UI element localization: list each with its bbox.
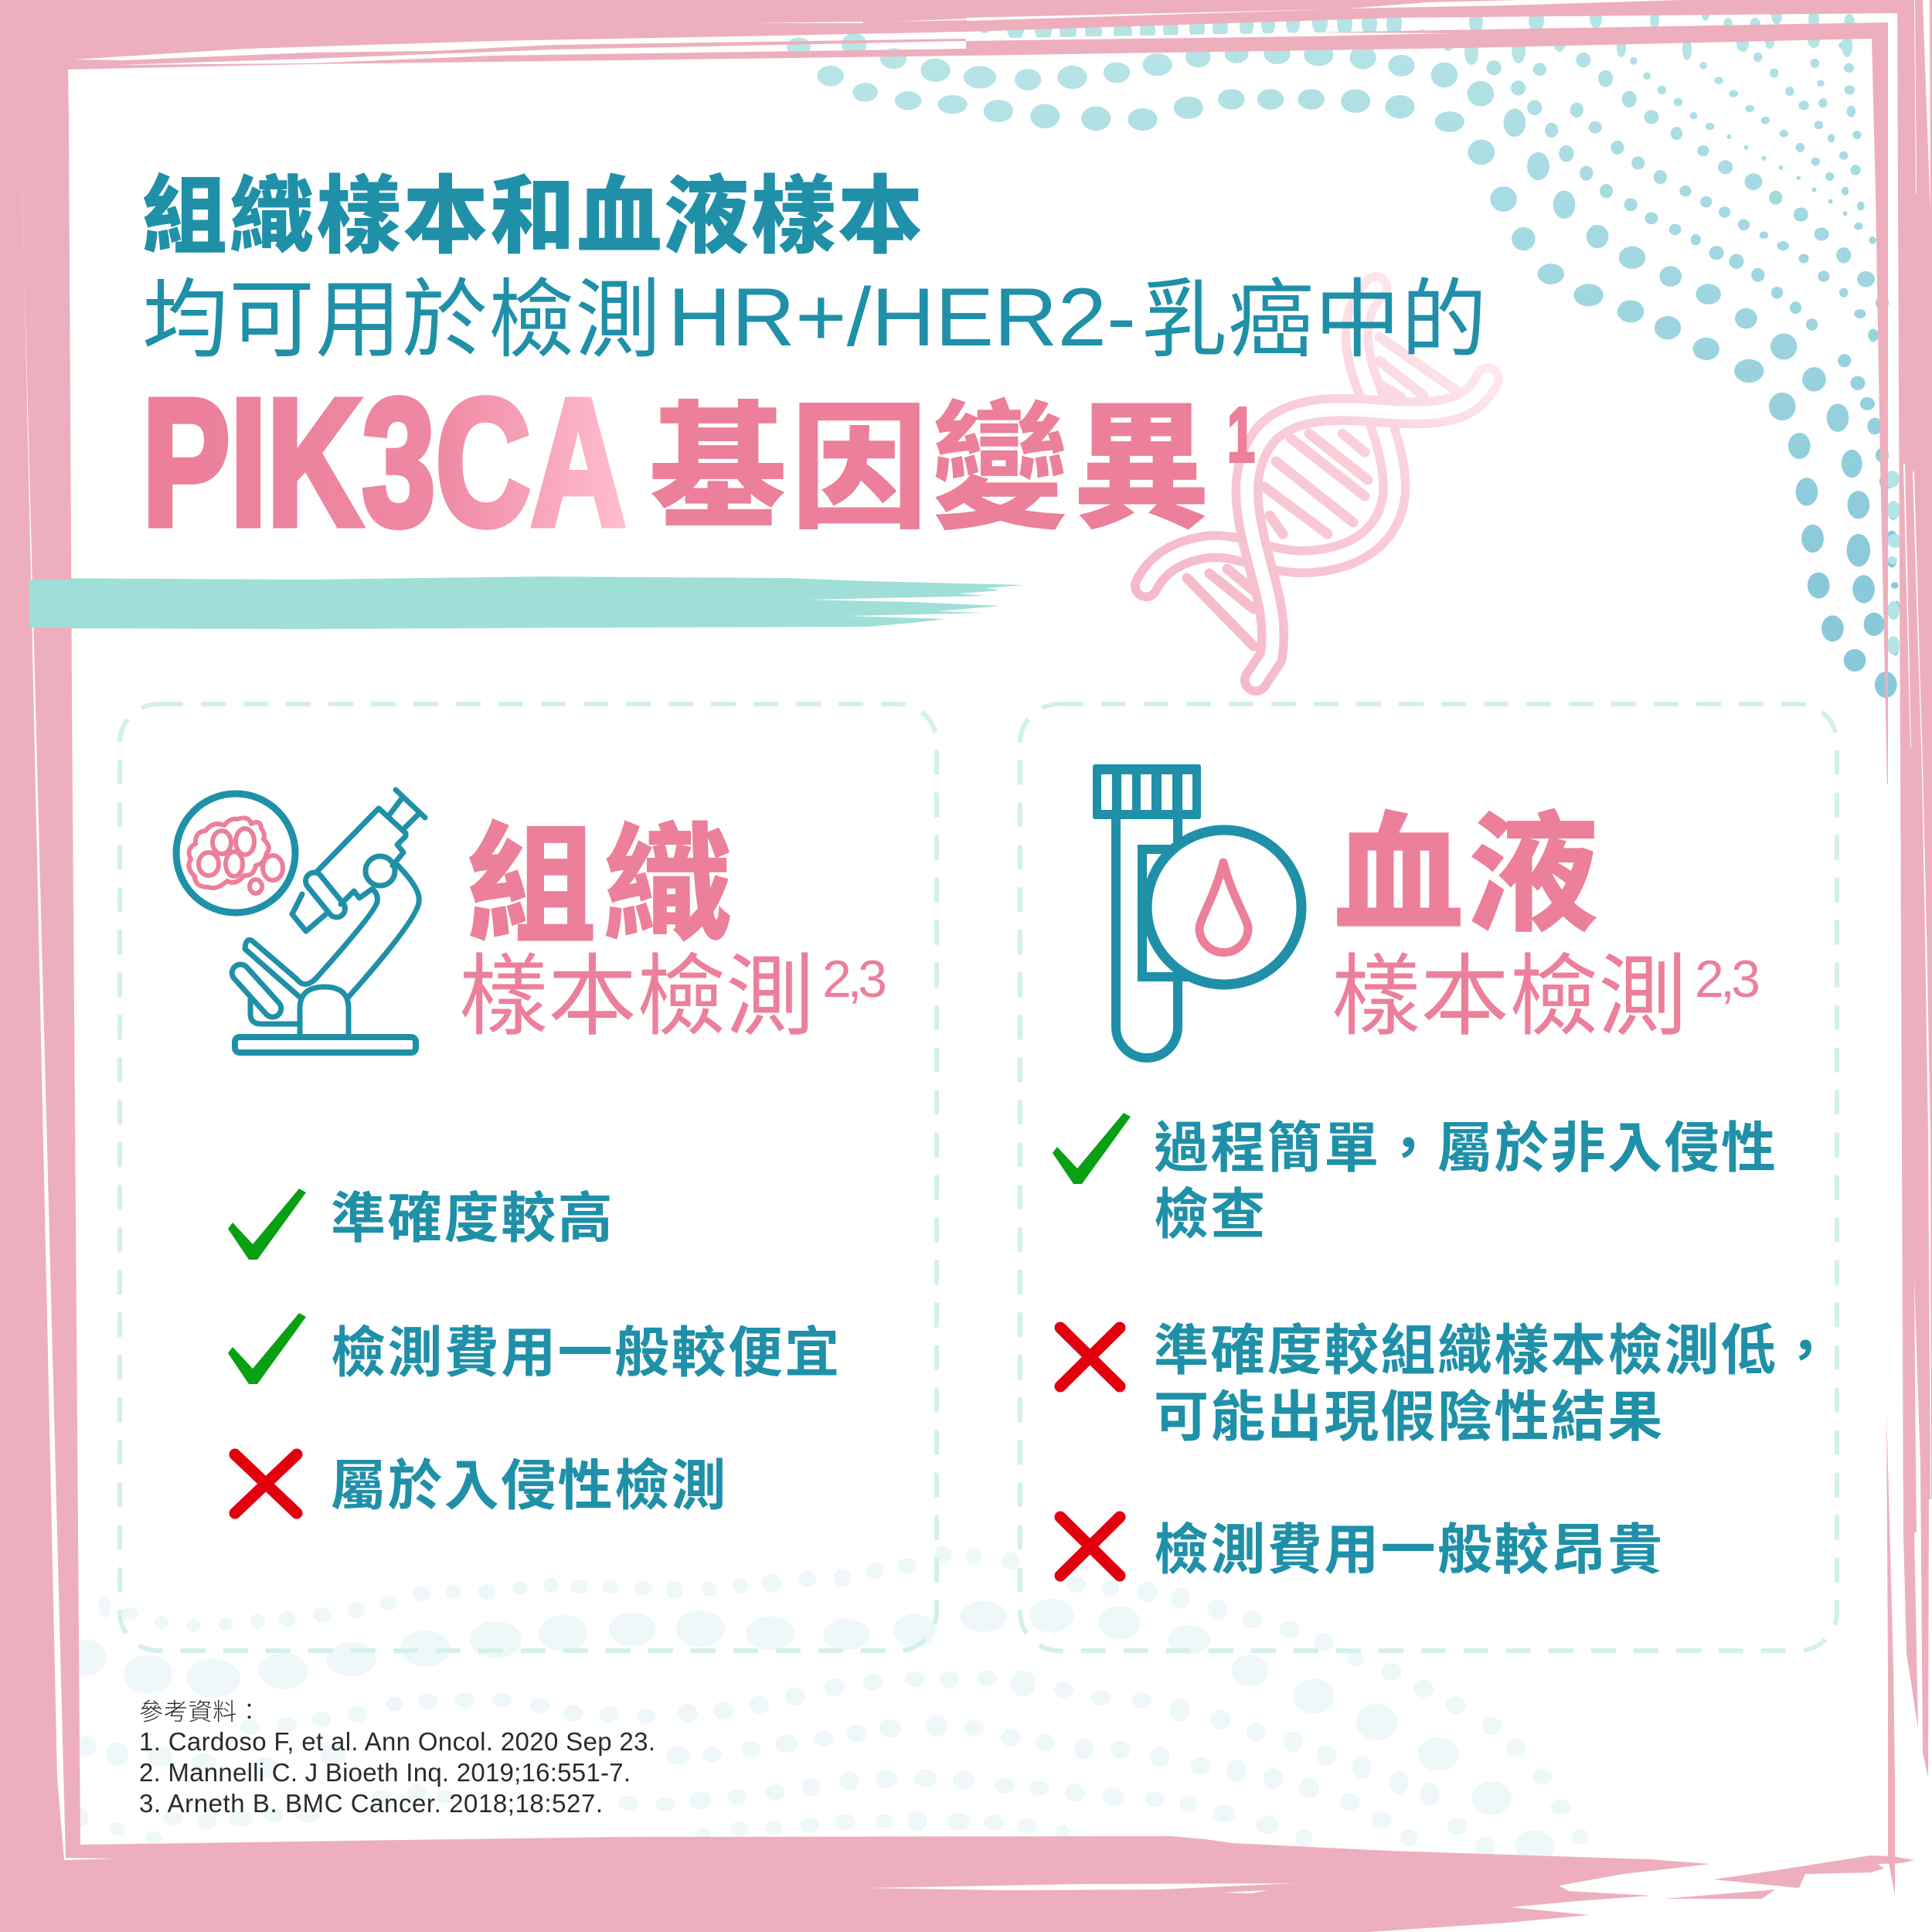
panel: tissue — [120, 704, 937, 1651]
icon: test tube with blood drop — [1093, 764, 1301, 1058]
references: 1. Cardoso F, et al. Ann Oncol. 2020 Sep 23. — [139, 1727, 655, 1756]
references: 3. Arneth B. BMC Cancer. 2018;18:527. — [139, 1789, 603, 1818]
title line 2: 乳癌中的 — [1141, 250, 1488, 374]
title line 3: PIK3CA: PIK3CA — [142, 361, 626, 563]
title line 2 — [142, 250, 1488, 374]
reference marker 2,3: 2,3 — [822, 950, 887, 1009]
title — [142, 147, 1488, 563]
panel border — [120, 704, 937, 1651]
icon: microscope — [176, 790, 425, 1053]
list item: check: 檢測費用一般較便宜 — [331, 1309, 842, 1388]
list item: check: 過程簡單，屬於非入侵性 — [1154, 1104, 1777, 1183]
list item: cross: 準確度較組織樣本檢測低， — [1154, 1307, 1835, 1386]
list item: check — [1053, 1104, 1777, 1250]
teal brush stroke — [29, 577, 1025, 629]
title line 2: 均可用於檢測 — [142, 250, 662, 374]
title line 3: 基因變異: 基因變異 — [649, 358, 1210, 556]
background dots: faint bottom pattern — [66, 1546, 1589, 1864]
heading: blood: 血液 — [1334, 770, 1598, 957]
references: 參考資料： — [139, 1699, 261, 1726]
panel border — [1020, 704, 1837, 1651]
icon: DNA helix — [1146, 287, 1488, 680]
list item: cross: 屬於入侵性檢測 — [331, 1442, 728, 1521]
subheading: sample test: 樣本檢測 — [459, 925, 815, 1053]
reference marker 2,3: 2,3 — [1695, 950, 1760, 1009]
brush left overlap on the frame — [29, 580, 76, 628]
list item: cross — [1060, 1307, 1835, 1452]
heading: tissue: 組織 — [467, 781, 733, 968]
title line 2: HR+/HER2- — [668, 270, 1136, 363]
references: 2. Mannelli C. J Bioeth Inq. 2019;16:551-7. — [139, 1758, 631, 1787]
background dots: top right teal swirl — [787, 32, 1900, 698]
footnote marker 1: 1 — [1227, 392, 1255, 478]
list item: check: 準確度較高 — [331, 1175, 614, 1253]
list item: check: 檢查 — [1154, 1171, 1267, 1250]
background dots: row behind the top frame strokes — [976, 0, 1903, 655]
list item: cross: 可能出現假陰性結果 — [1154, 1373, 1665, 1452]
list item: cross: 檢測費用一般較昂貴 — [1154, 1506, 1665, 1585]
references — [139, 1699, 655, 1818]
panel: blood — [1020, 704, 1837, 1651]
subheading: sample test: 樣本檢測 — [1332, 925, 1687, 1053]
title line 1: 組織樣本和血液樣本 — [142, 147, 924, 270]
list item: check — [228, 1175, 614, 1260]
